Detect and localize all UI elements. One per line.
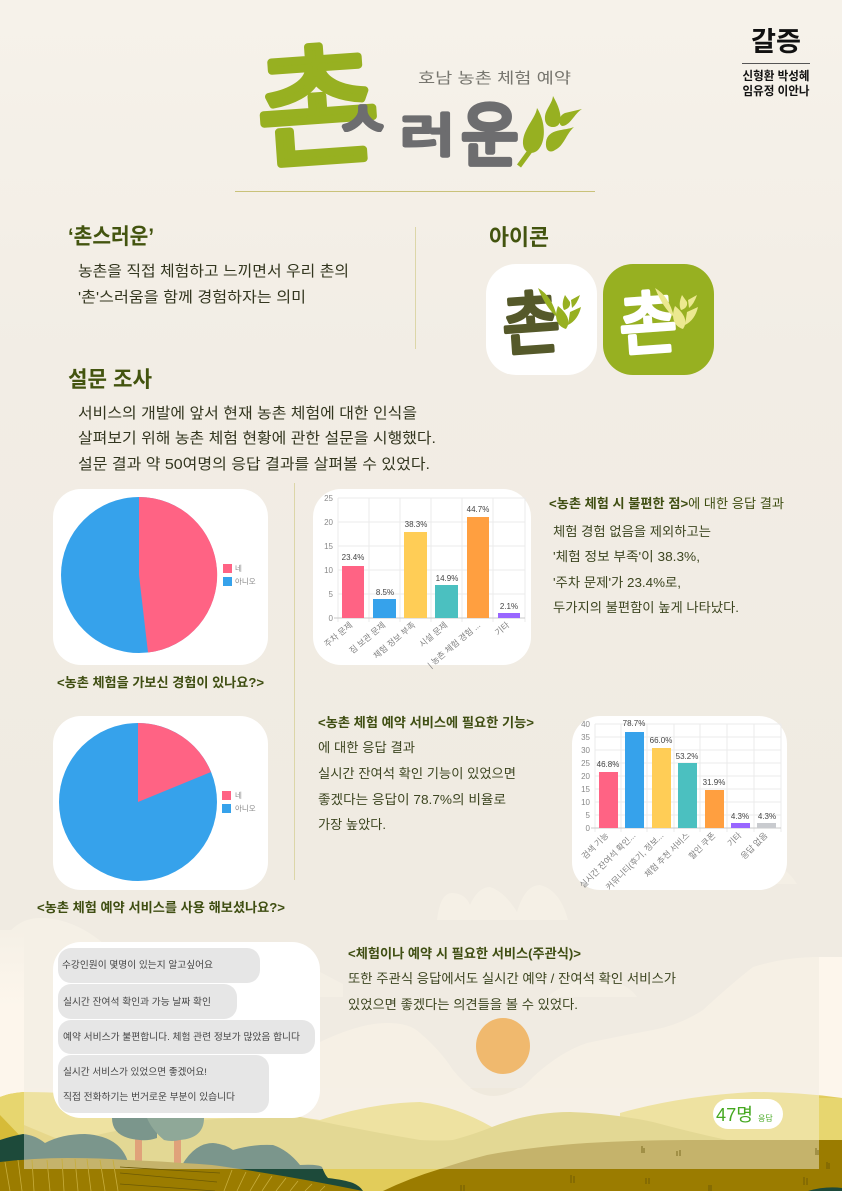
panel: bar chart features: 46.8% (597, 760, 619, 769)
panel: open-ended answers (53, 942, 320, 1118)
panel: bar chart inconveniences: 시설 문제 (417, 620, 449, 649)
panel: bar chart features: 검색 기능 (580, 830, 611, 861)
overlay panel (24, 1088, 819, 1169)
answer bubble 4: 직접 전화하기는 번거로운 부분이 있습니다 (63, 1091, 235, 1103)
text block: needed features: 에 대한 응답 결과 (318, 740, 415, 755)
caption: pie 2: <농촌 체험 예약 서비스를 사용 해보셨나요?> (37, 900, 285, 915)
panel: pie chart experience: 네 (235, 564, 242, 573)
panel: bar chart inconveniences: 44.7% (467, 505, 489, 514)
logo wordmark: 운 (461, 80, 519, 181)
logo wordmark (260, 42, 518, 168)
panel: bar chart features: 78.7% (623, 719, 645, 728)
panel: bar chart features: 기타 (725, 830, 744, 848)
panel: bar chart inconveniences: 주차 문제 (322, 620, 354, 649)
section: meaning (68, 224, 349, 306)
answer bubble 2 (58, 984, 237, 1019)
panel: bar chart inconveniences: 23.4% (342, 553, 364, 562)
panel: bar chart features: 20 (581, 772, 591, 781)
text block: open-ended: 또한 주관식 응답에서도 실시간 예약 / 잔여석 확인 서비스가 (348, 971, 676, 986)
panel: bar chart inconveniences: 체험 정보 부족 (371, 620, 417, 661)
section: icons: 아이콘 (489, 225, 549, 250)
text block: inconveniences (549, 496, 784, 615)
panel: bar chart features: 53.2% (676, 752, 698, 761)
text block: open-ended (348, 946, 676, 1012)
response count badge: 응답 (758, 1113, 773, 1123)
text block: inconveniences: <농촌 체험 시 불편한 점>에 대한 응답 결과 (549, 496, 784, 511)
far hills (0, 1092, 492, 1191)
panel: bar chart inconveniences: 2.1% (500, 602, 518, 611)
answer bubble 4 (58, 1055, 269, 1113)
panel: pie chart service use: 네 (235, 791, 242, 800)
farm fields (0, 1158, 363, 1191)
text block: inconveniences: 두가지의 불편함이 높게 나타났다. (553, 600, 739, 615)
panel: bar chart features: 10 (581, 798, 591, 807)
icon: white app icon: 촌 (498, 267, 563, 370)
answer bubble 1: 수강인원이 몇명이 있는지 알고싶어요 (62, 959, 213, 971)
panel: bar chart inconveniences: 5 (329, 590, 334, 599)
panel: bar chart features: 15 (581, 785, 591, 794)
panel: bar chart inconveniences: 10 (324, 566, 334, 575)
logo wheat ear (519, 96, 582, 166)
section: survey intro: 설문 조사 (68, 367, 152, 392)
text block: inconveniences: 체험 경험 없음을 제외하고는 (553, 524, 711, 539)
panel: pie chart service use (53, 716, 268, 890)
panel: bar chart features: 25 (581, 759, 591, 768)
panel: bar chart inconveniences: | 농촌 체험 경험 ... (426, 620, 482, 670)
panel: bar chart inconveniences: 38.3% (405, 520, 427, 529)
panel: bar chart inconveniences: 14.9% (436, 574, 458, 583)
text block: needed features (318, 715, 534, 832)
panel: bar chart inconveniences: 8.5% (376, 588, 394, 597)
panel: bar chart features: 4.3% (758, 812, 776, 821)
caption: pie 1: <농촌 체험을 가보신 경험이 있나요?> (57, 675, 264, 690)
section: meaning: ‘촌스러운’ (68, 224, 154, 249)
logo wordmark: 러 (400, 99, 455, 166)
section: survey intro: 살펴보기 위해 농촌 체험 현황에 관한 설문을 시행했다. (78, 430, 436, 447)
section: survey intro (68, 367, 436, 473)
logo (260, 42, 582, 168)
logo wordmark: 촌 (249, 0, 385, 195)
section: survey intro: 서비스의 개발에 앞서 현재 농촌 체험에 대한 인식을 (78, 405, 417, 422)
bushes (0, 1134, 128, 1170)
panel: pie chart service use: 아니오 (235, 803, 256, 813)
panel: bar chart features (572, 716, 787, 892)
panel: bar chart features: 응답 없음 (739, 830, 770, 861)
panel: bar chart inconveniences: 짐 보관 문제 (347, 620, 387, 656)
text block: inconveniences: '체험 정보 부족'이 38.3%, (553, 549, 700, 564)
response count badge (713, 1099, 783, 1129)
tagline: 호남 농촌 체험 예약 (418, 70, 571, 87)
panel: bar chart inconveniences: 25 (324, 494, 334, 503)
panel: bar chart features: 0 (586, 824, 591, 833)
title rule (235, 191, 595, 192)
answer bubble 1 (58, 948, 260, 983)
panel: bar chart features: 커뮤니티(후기, 정보... (604, 830, 665, 892)
middle hill (60, 1112, 727, 1191)
logo wordmark: 스 (340, 88, 386, 160)
text block: needed features: <농촌 체험 예약 서비스에 필요한 기능> (318, 715, 534, 730)
panel: pie chart experience: 아니오 (235, 576, 256, 586)
text block: needed features: 좋겠다는 응답이 78.7%의 비율로 (318, 792, 506, 807)
icon: green app icon (603, 264, 714, 375)
panel: bar chart features: 체험 추천 서비스 (642, 830, 692, 879)
icon: white app icon (486, 264, 597, 375)
panel: bar chart features: 5 (586, 811, 591, 820)
trees (112, 1110, 204, 1166)
text block: inconveniences: '주차 문제'가 23.4%로, (553, 575, 681, 590)
panel: pie chart experience (53, 489, 268, 665)
answer bubble 3 (58, 1020, 315, 1054)
team credit: 갈증 (751, 27, 801, 57)
outer light border (0, 930, 24, 1100)
text block: open-ended: 있었으면 좋겠다는 의견들을 볼 수 있었다. (348, 997, 578, 1012)
panel: bar chart inconveniences: 기타 (493, 620, 511, 638)
panel: bar chart features: 4.3% (731, 812, 749, 821)
panel: bar chart features: 35 (581, 733, 591, 742)
icon: green app icon: 촌 (615, 267, 680, 370)
team credit: 임유정 이안나 (742, 84, 810, 98)
section: icons (486, 225, 714, 375)
panel: bar chart inconveniences: 15 (324, 542, 334, 551)
panel: bar chart features: 할인 쿠폰 (687, 830, 718, 861)
answer bubble 4: 실시간 서비스가 있었으면 좋겠어요! (63, 1066, 207, 1078)
answer bubble 3: 예약 서비스가 불편합니다. 체험 관련 정보가 많았음 합니다 (63, 1031, 300, 1043)
section: survey intro: 설문 결과 약 50여명의 응답 결과를 살펴볼 수 있었다. (78, 456, 430, 473)
panel: bar chart inconveniences: 0 (329, 614, 334, 623)
sun (476, 1018, 530, 1074)
team credit: 신형환 박성혜 (742, 68, 810, 83)
panel: bar chart features: 40 (581, 720, 591, 729)
section: meaning: '촌'스러움을 함께 경험하자는 의미 (78, 289, 306, 306)
panel: bar chart features: 실시간 잔여석 확인... (578, 830, 637, 890)
right brown hill (383, 1140, 842, 1191)
panel: bar chart features: 30 (581, 746, 591, 755)
response count badge: 47명 (716, 1105, 753, 1125)
panel: bar chart inconveniences (313, 489, 531, 670)
text block: needed features: 가장 높았다. (318, 817, 386, 832)
answer bubble 2: 실시간 잔여석 확인과 가능 날짜 확인 (63, 996, 211, 1008)
text block: open-ended: <체험이나 예약 시 필요한 서비스(주관식)> (348, 946, 581, 961)
panel: bar chart features: 31.9% (703, 778, 725, 787)
team credit (742, 27, 810, 98)
panel: bar chart inconveniences: 20 (324, 518, 334, 527)
text block: needed features: 실시간 잔여석 확인 기능이 있었으면 (318, 766, 516, 781)
panel: bar chart features: 66.0% (650, 736, 672, 745)
section: meaning: 농촌을 직접 체험하고 느끼면서 우리 촌의 (78, 263, 349, 280)
